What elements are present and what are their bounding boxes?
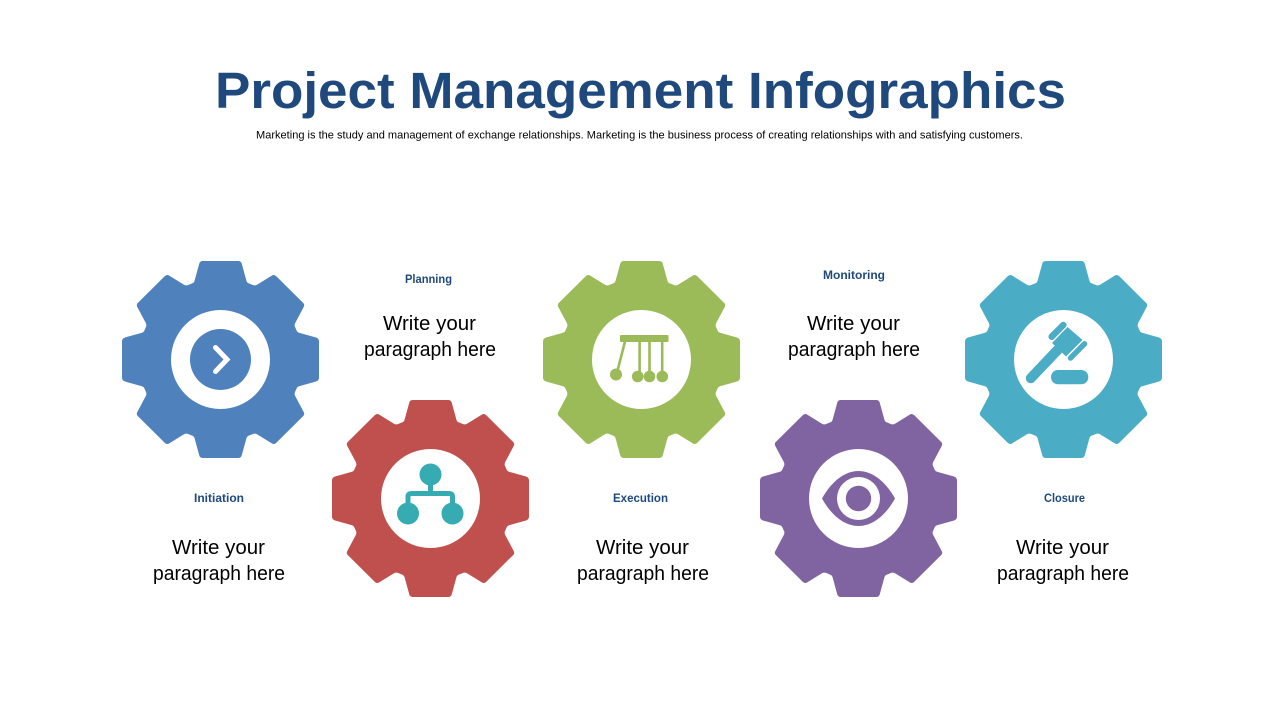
text: planning [364, 274, 496, 361]
subtitle: Marketing is the study and management of exchange relationships. Marketing is the business process of creating relationships with and satisfying customers. [256, 130, 1023, 142]
text: monitoring: Monitoring [823, 270, 885, 282]
gear: execution [543, 261, 740, 458]
text: initiation: Write your [172, 537, 265, 559]
text: monitoring: paragraph here [788, 339, 920, 361]
gear: monitoring [760, 400, 957, 597]
text: execution [577, 493, 709, 585]
icon: newton cradle [610, 335, 668, 382]
gear: initiation [122, 261, 319, 458]
text: closure: Write your [1016, 537, 1109, 559]
text: planning: paragraph here [364, 339, 496, 361]
text: planning: Planning [405, 274, 452, 286]
text: execution: Execution [613, 493, 668, 505]
text: monitoring [788, 270, 920, 361]
text: closure: Closure [1044, 493, 1085, 505]
icon: hierarchy [397, 464, 464, 524]
text: initiation: Initiation [194, 493, 244, 505]
text: initiation [153, 493, 285, 585]
title: Project Management Infographics [215, 62, 1066, 119]
text: monitoring: Write your [807, 313, 900, 335]
text: closure: paragraph here [997, 563, 1129, 585]
icon: gavel [1031, 325, 1088, 384]
text: execution: Write your [596, 537, 689, 559]
text: planning: Write your [383, 313, 476, 335]
text: initiation: paragraph here [153, 563, 285, 585]
gear: planning [332, 400, 529, 597]
icon: eye [822, 471, 895, 526]
text: closure [997, 493, 1129, 585]
icon: chevron [216, 348, 227, 372]
gear: closure [965, 261, 1162, 458]
text: execution: paragraph here [577, 563, 709, 585]
